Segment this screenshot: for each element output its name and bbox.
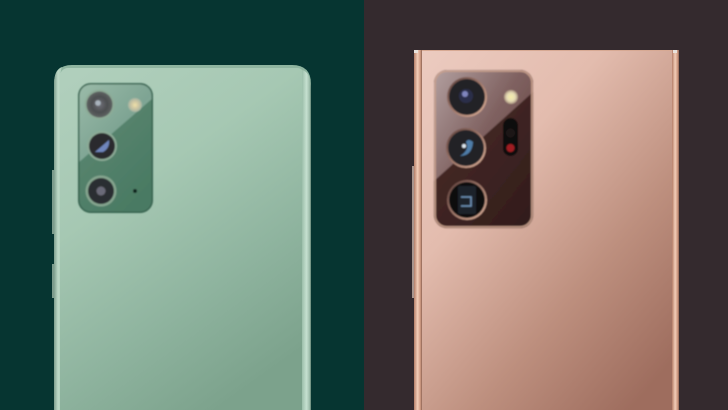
sensor pill (503, 118, 518, 156)
lens 1 (447, 77, 487, 117)
lens 2 (87, 131, 117, 161)
phone body (414, 50, 679, 410)
flash (128, 98, 142, 112)
corner highlights (414, 50, 677, 53)
flash (504, 90, 518, 104)
side buttons (52, 170, 55, 298)
camera module (434, 70, 533, 228)
phone body (54, 65, 311, 410)
side buttons (412, 166, 415, 298)
lens 1 (84, 90, 114, 120)
left edge (54, 67, 62, 410)
phone: bronze (412, 50, 679, 410)
panel: dark brown background (364, 0, 728, 410)
right edge (302, 70, 311, 410)
right edge (672, 50, 679, 410)
lens 3 (447, 180, 487, 220)
back panel (60, 68, 305, 410)
left edge (414, 50, 422, 410)
lens 2 (446, 128, 486, 168)
camera module (78, 83, 153, 213)
panel: green background (0, 0, 364, 410)
microphone dot (133, 189, 137, 193)
phone: green (52, 65, 311, 410)
lens 3 (86, 176, 116, 206)
back panel (422, 51, 672, 410)
